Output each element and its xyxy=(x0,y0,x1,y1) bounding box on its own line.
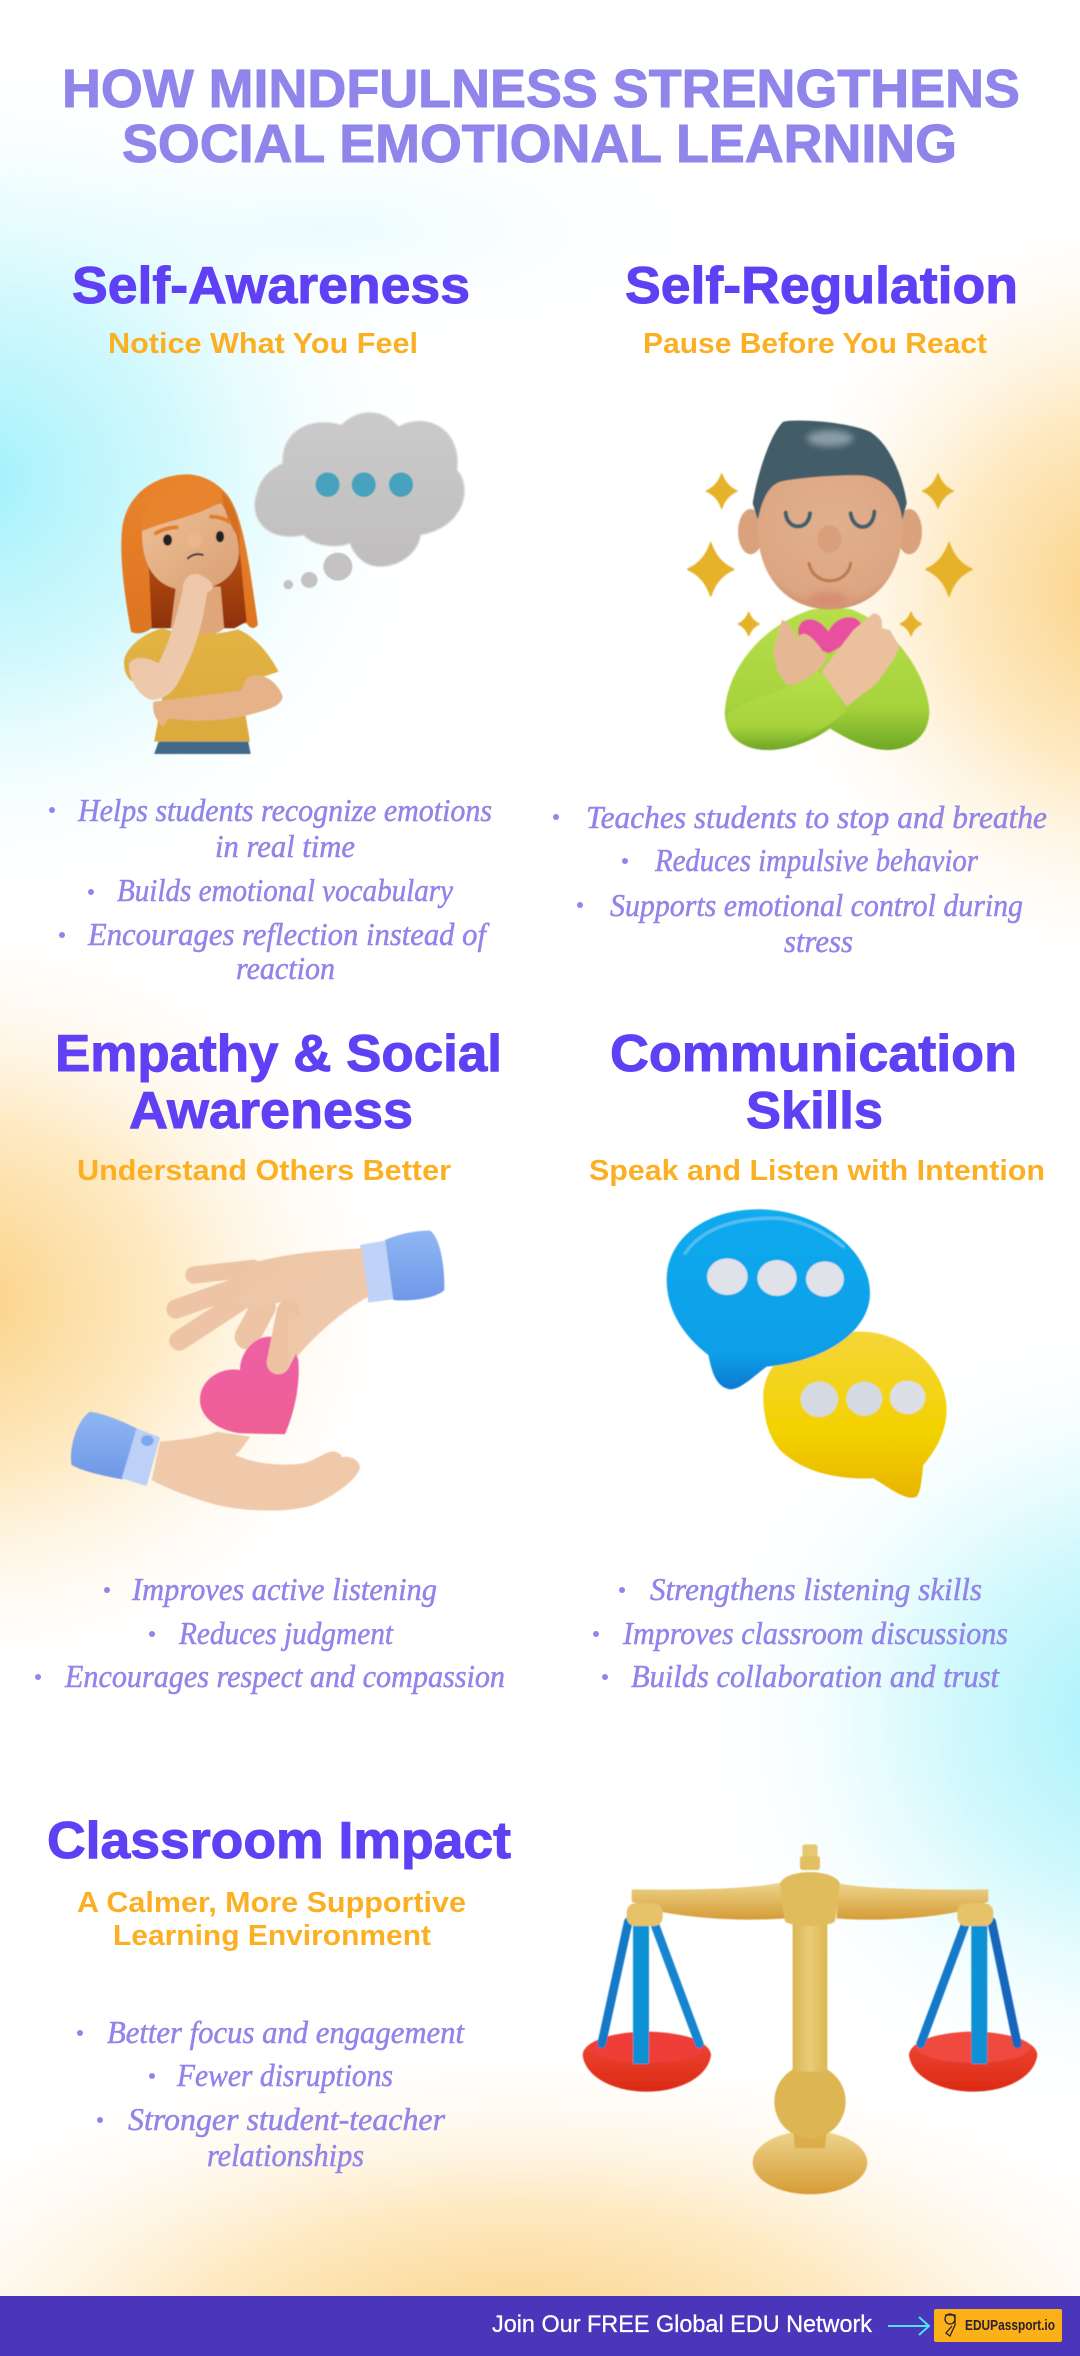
subheading: speak and listen with intention: Speak and Listen with Intention xyxy=(589,1155,1045,1187)
heading: communication skills: Communication xyxy=(610,1025,1017,1083)
subheading: understand others better: Understand Others Better xyxy=(77,1155,451,1187)
heading: communication skills: Skills xyxy=(746,1082,883,1140)
heading: communication skills xyxy=(610,1025,1017,1140)
bullet list: empathy: Encourages respect and compassion xyxy=(64,1658,505,1694)
bullet list: self-awareness xyxy=(49,792,492,986)
bullet list: communication: Improves classroom discussions xyxy=(622,1615,1008,1651)
heading: self-regulation: Self-Regulation xyxy=(625,257,1018,315)
bullet list: communication xyxy=(593,1571,1008,1694)
illustration: calm boy hugging heart with sparkles xyxy=(688,420,972,750)
bullet list: self-awareness: Encourages reflection instead of xyxy=(87,916,490,952)
bullet list: self-regulation: Teaches students to stop and breathe xyxy=(586,799,1047,835)
illustration: hands passing a heart xyxy=(71,1231,444,1511)
bullet list: communication: Builds collaboration and trust xyxy=(631,1658,1000,1694)
logo badge xyxy=(934,2309,1062,2342)
subheading: a calmer learning environment xyxy=(77,1887,466,1952)
bullet list: empathy: Reduces judgment xyxy=(178,1615,394,1651)
bullet list: classroom impact xyxy=(77,2014,465,2173)
bullet list: empathy: Improves active listening xyxy=(131,1571,437,1607)
bullet list: empathy xyxy=(35,1571,505,1694)
bullet list: self-awareness: in real time xyxy=(215,828,355,864)
panel: self-regulation xyxy=(553,257,1047,959)
panel: classroom impact xyxy=(47,1812,1037,2194)
panel: empathy and social awareness xyxy=(35,1025,505,1694)
heading: empathy and social awareness: Empathy & Social xyxy=(55,1025,502,1083)
illustration: balance scale xyxy=(583,1844,1037,2194)
subheading: pause before you react: Pause Before You React xyxy=(643,328,987,360)
bullet list: classroom impact: Stronger student-teacher xyxy=(128,2101,446,2137)
footer bar xyxy=(0,2296,1080,2356)
panel: self-awareness xyxy=(49,257,492,986)
footer call to action: Join Our FREE Global EDU Network xyxy=(492,2311,873,2338)
bullet list: communication: Strengthens listening skills xyxy=(650,1571,982,1607)
heading: empathy and social awareness xyxy=(55,1025,502,1140)
subheading: a calmer learning environment: Learning Environment xyxy=(113,1920,431,1952)
heading: empathy and social awareness: Awareness xyxy=(129,1082,413,1140)
logo text: EDUPassport.io xyxy=(965,2317,1055,2334)
heading: classroom impact: Classroom Impact xyxy=(47,1812,511,1870)
bullet list: self-regulation: Reduces impulsive behavior xyxy=(654,842,978,878)
bullet list: self-awareness: Helps students recognize emotions xyxy=(77,792,492,828)
title: HOW MINDFULNESS STRENGTHENS xyxy=(62,59,1020,119)
bullet list: self-regulation xyxy=(553,799,1047,959)
bullet list: self-awareness: reaction xyxy=(236,950,335,986)
illustration: thinking girl with thought cloud xyxy=(121,413,464,754)
title: SOCIAL EMOTIONAL LEARNING xyxy=(122,114,957,174)
bullet list: classroom impact: Fewer disruptions xyxy=(176,2057,393,2093)
subheading: a calmer learning environment: A Calmer, More Supportive xyxy=(77,1887,466,1919)
bullet list: classroom impact: Better focus and engagement xyxy=(107,2014,465,2050)
bullet list: self-regulation: Supports emotional control during xyxy=(610,887,1023,923)
subheading: notice what you feel: Notice What You Feel xyxy=(108,328,418,360)
arrow xyxy=(888,2317,929,2335)
heading: self-awareness: Self-Awareness xyxy=(72,257,470,315)
illustration: blue and yellow speech bubbles xyxy=(667,1209,947,1498)
logo icon xyxy=(945,2314,955,2336)
bullet list: self-awareness: Builds emotional vocabulary xyxy=(117,872,454,908)
panel: communication skills xyxy=(589,1025,1045,1694)
bullet list: self-regulation: stress xyxy=(784,923,853,959)
bullet list: classroom impact: relationships xyxy=(207,2137,364,2173)
title xyxy=(62,59,1020,174)
